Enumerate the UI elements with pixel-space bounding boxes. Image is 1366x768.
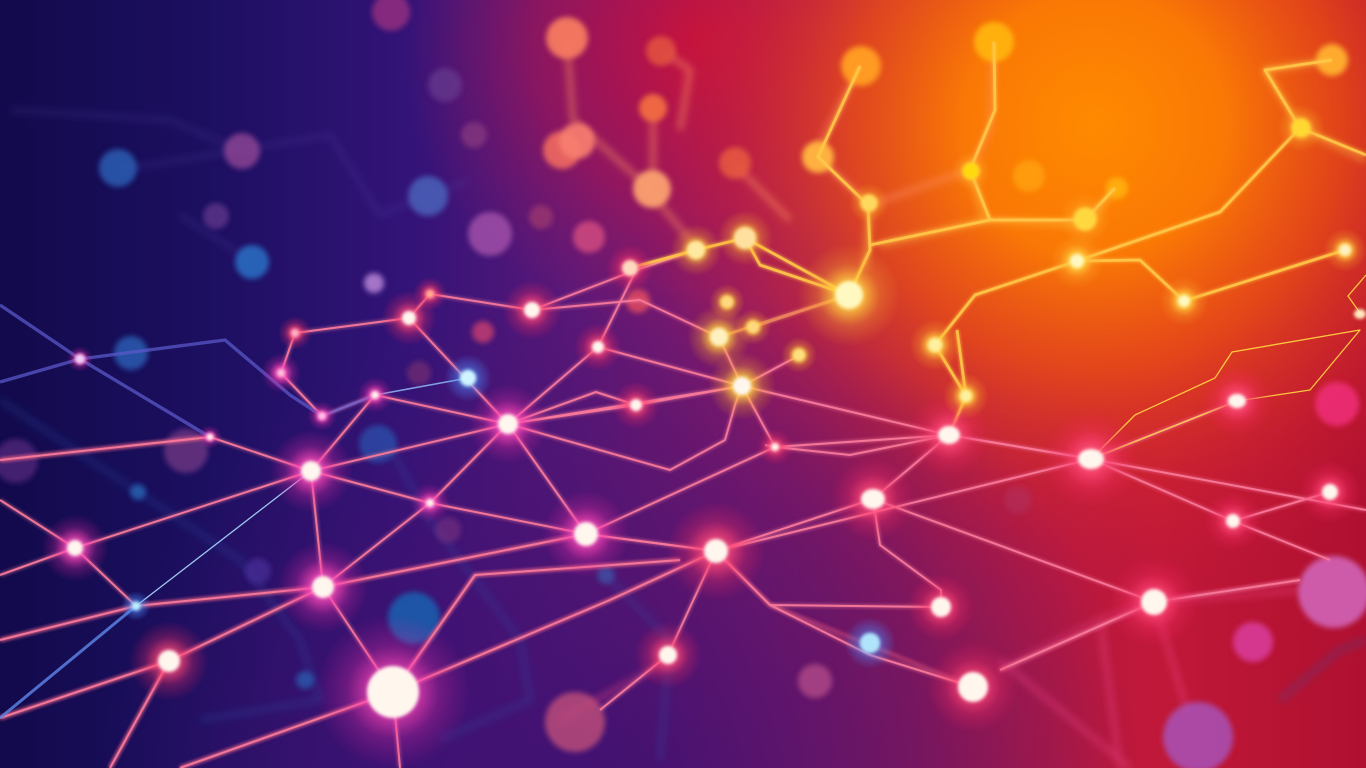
glowing nodes yellow — [670, 104, 1366, 419]
sharp network lines pink — [0, 250, 1366, 768]
glowing nodes pink — [41, 244, 1362, 768]
blue and violet lines left — [0, 305, 468, 718]
glowing nodes blue — [121, 354, 896, 669]
thick soft pink lines — [0, 437, 1300, 768]
bright node cores — [67, 119, 1366, 718]
thin golden lines right — [1091, 275, 1366, 459]
sharp network lines yellow and orange — [630, 42, 1366, 435]
